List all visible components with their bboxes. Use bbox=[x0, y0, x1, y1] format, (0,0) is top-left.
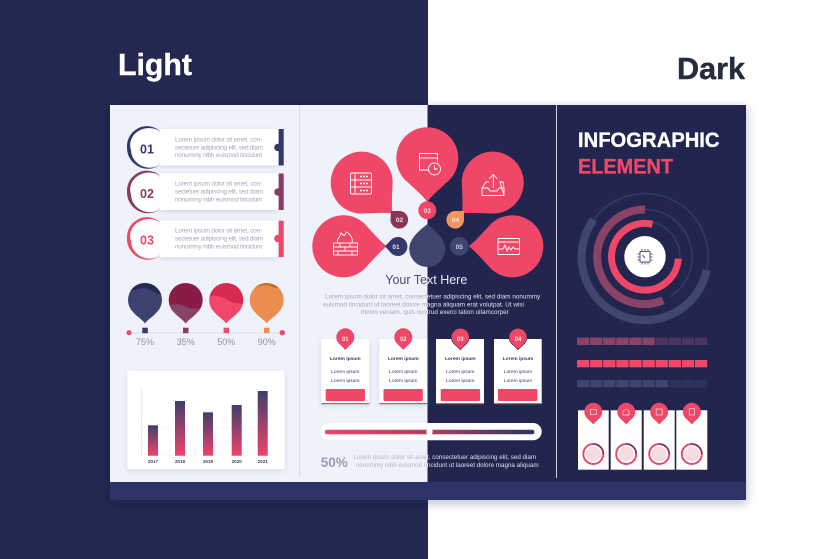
bar chart: 2017 bbox=[148, 459, 159, 464]
balloon 90% bbox=[250, 283, 284, 345]
balloon 50%: 50% bbox=[217, 337, 235, 347]
list row 02: nonummy nibh euismod tincidunt bbox=[175, 196, 262, 204]
petal diagram bbox=[312, 127, 543, 277]
balloon 35%: 35% bbox=[177, 337, 195, 347]
panel: brochure base bbox=[110, 105, 746, 500]
footer band bbox=[110, 482, 746, 500]
marker 01: 01 bbox=[392, 244, 400, 251]
stat description: t, consectetuer adipiscing elit, sed diam bbox=[427, 454, 536, 461]
diagram title: xt Here bbox=[427, 273, 467, 287]
card 03 bbox=[436, 328, 484, 404]
list row 03: nonummy nibh euismod tincidunt bbox=[175, 244, 262, 250]
petal 03: schedule bbox=[396, 127, 458, 202]
card 01: Lorem ipsum bbox=[331, 369, 359, 375]
card 04 bbox=[494, 328, 542, 404]
marker 04 bbox=[446, 211, 464, 229]
diagram body text: trud exerci tation ullamcorper bbox=[427, 309, 509, 316]
balloon 90%: 90% bbox=[258, 337, 276, 347]
panel divider left bbox=[299, 105, 300, 478]
mini card 2 bbox=[611, 403, 642, 470]
list row 02: Lorem ipsum dolor sit amet, con- bbox=[175, 180, 262, 188]
diagram body text: agna aliquam erat volutpat. Ut wisi bbox=[427, 302, 524, 308]
progress row: maroon 6 of 10 bbox=[577, 338, 707, 345]
marker 02: 02 bbox=[396, 217, 403, 224]
diagram title: Your Te bbox=[385, 273, 427, 287]
card 01 bbox=[321, 328, 369, 404]
stat: 50%: 50% bbox=[321, 455, 348, 470]
title: Infographic Element bbox=[578, 129, 720, 178]
radial chart bbox=[582, 194, 708, 320]
panel: numbered list bbox=[127, 126, 284, 260]
bar chart: 2018 bbox=[175, 459, 186, 464]
list row 01: 01 bbox=[140, 142, 154, 156]
card 02: Lorem ipsum bbox=[388, 356, 419, 362]
list row 01 bbox=[127, 126, 284, 169]
petal 02: server bbox=[318, 139, 414, 235]
heading: Dark: Dark bbox=[677, 51, 746, 86]
title: Infographic Element: ELEMENT bbox=[578, 155, 673, 178]
petal 01: firewall bbox=[312, 215, 387, 277]
mini cards bbox=[578, 403, 707, 470]
balloon 75% bbox=[128, 283, 162, 345]
diagram body text bbox=[323, 294, 541, 316]
card 02 bbox=[379, 328, 427, 404]
card 02: Lorem ipsum bbox=[389, 378, 417, 384]
list row 01: nonummy nibh euismod tincidunt bbox=[175, 152, 262, 159]
card 01: Lorem ipsum bbox=[331, 378, 359, 384]
card 02: Lorem ipsum bbox=[389, 369, 417, 375]
diagram body text: Lorem ipsum dolor sit amet, consect bbox=[325, 294, 427, 300]
diagram body text: etuer adipiscing elit, sed diam nonummy bbox=[427, 294, 541, 300]
petal 05: monitor bbox=[469, 215, 543, 277]
card 03: Lorem ipsum bbox=[445, 356, 476, 362]
marker 03 bbox=[418, 201, 436, 219]
list row 03 bbox=[127, 217, 284, 260]
stat description: Lorem ipsum dolor sit ame bbox=[353, 454, 428, 461]
mini card 4 bbox=[676, 403, 707, 470]
title: Infographic Element: INFOGRAPHIC bbox=[578, 129, 720, 152]
card 03: Lorem ipsum bbox=[446, 378, 474, 384]
balloon 50% bbox=[209, 283, 244, 345]
background: navy left side bbox=[0, 0, 428, 559]
stat description bbox=[353, 454, 539, 469]
balloon chart bbox=[126, 283, 285, 345]
icon: chip bbox=[638, 249, 652, 264]
price cards bbox=[321, 328, 542, 404]
bar chart: 2021 bbox=[258, 459, 268, 464]
center drop bbox=[409, 224, 445, 267]
marker 01 bbox=[385, 237, 407, 256]
bar chart: 2019 bbox=[203, 459, 214, 464]
mini card 1 bbox=[578, 403, 609, 470]
card 04: 04 bbox=[515, 337, 522, 343]
bar chart bbox=[127, 371, 285, 469]
marker 05 bbox=[450, 237, 469, 256]
mini card 3 bbox=[644, 403, 675, 470]
card 04: Lorem ipsum bbox=[504, 378, 532, 384]
card 03: Lorem ipsum bbox=[446, 369, 474, 375]
list row 01: sectetuer adipiscing elit, sed diam bbox=[175, 144, 263, 152]
marker 03: 03 bbox=[424, 208, 431, 215]
bar chart: 2020 bbox=[232, 459, 242, 464]
stat description: ncidunt ut laoreet dolore magna aliquam bbox=[427, 462, 539, 469]
card 03: 03 bbox=[457, 337, 464, 343]
list row 02 bbox=[127, 171, 284, 213]
list row 02: 02 bbox=[140, 187, 154, 201]
panel divider right bbox=[556, 105, 557, 478]
progress row: pink 10 of 10 bbox=[577, 360, 707, 367]
progress row: navy 7 of 10 bbox=[577, 380, 707, 387]
stat description: nonummy nibh euismod ti bbox=[356, 462, 427, 469]
list row 03: sectetuer adipiscing elit, sed diam bbox=[175, 236, 263, 242]
marker 02 bbox=[390, 211, 408, 229]
list row 02: sectetuer adipiscing elit, sed diam bbox=[175, 188, 263, 196]
card 04: Lorem ipsum bbox=[504, 369, 532, 375]
card 02: 02 bbox=[400, 337, 407, 343]
card 01: Lorem ipsum bbox=[330, 356, 361, 362]
diagram title bbox=[385, 273, 467, 287]
progress bars bbox=[577, 338, 707, 387]
marker 05: 05 bbox=[456, 244, 463, 251]
slider bbox=[321, 423, 542, 440]
heading: Light: Light bbox=[118, 47, 192, 82]
diagram body text: euismod tincidunt ut laoreet dolore m bbox=[323, 302, 427, 308]
diagram body text: minim veniam, quis nos bbox=[361, 309, 427, 316]
balloon 35% bbox=[168, 283, 203, 345]
card 04: Lorem ipsum bbox=[503, 356, 534, 362]
list row 03: 03 bbox=[140, 234, 154, 248]
card 01: 01 bbox=[342, 337, 349, 343]
marker 04: 04 bbox=[452, 217, 459, 224]
balloon 75%: 75% bbox=[136, 337, 154, 347]
list row 03: Lorem ipsum dolor sit amet, con- bbox=[175, 228, 262, 234]
list row 01: Lorem ipsum dolor sit amet, con- bbox=[175, 136, 262, 144]
petal 04: upload tray bbox=[440, 139, 537, 235]
